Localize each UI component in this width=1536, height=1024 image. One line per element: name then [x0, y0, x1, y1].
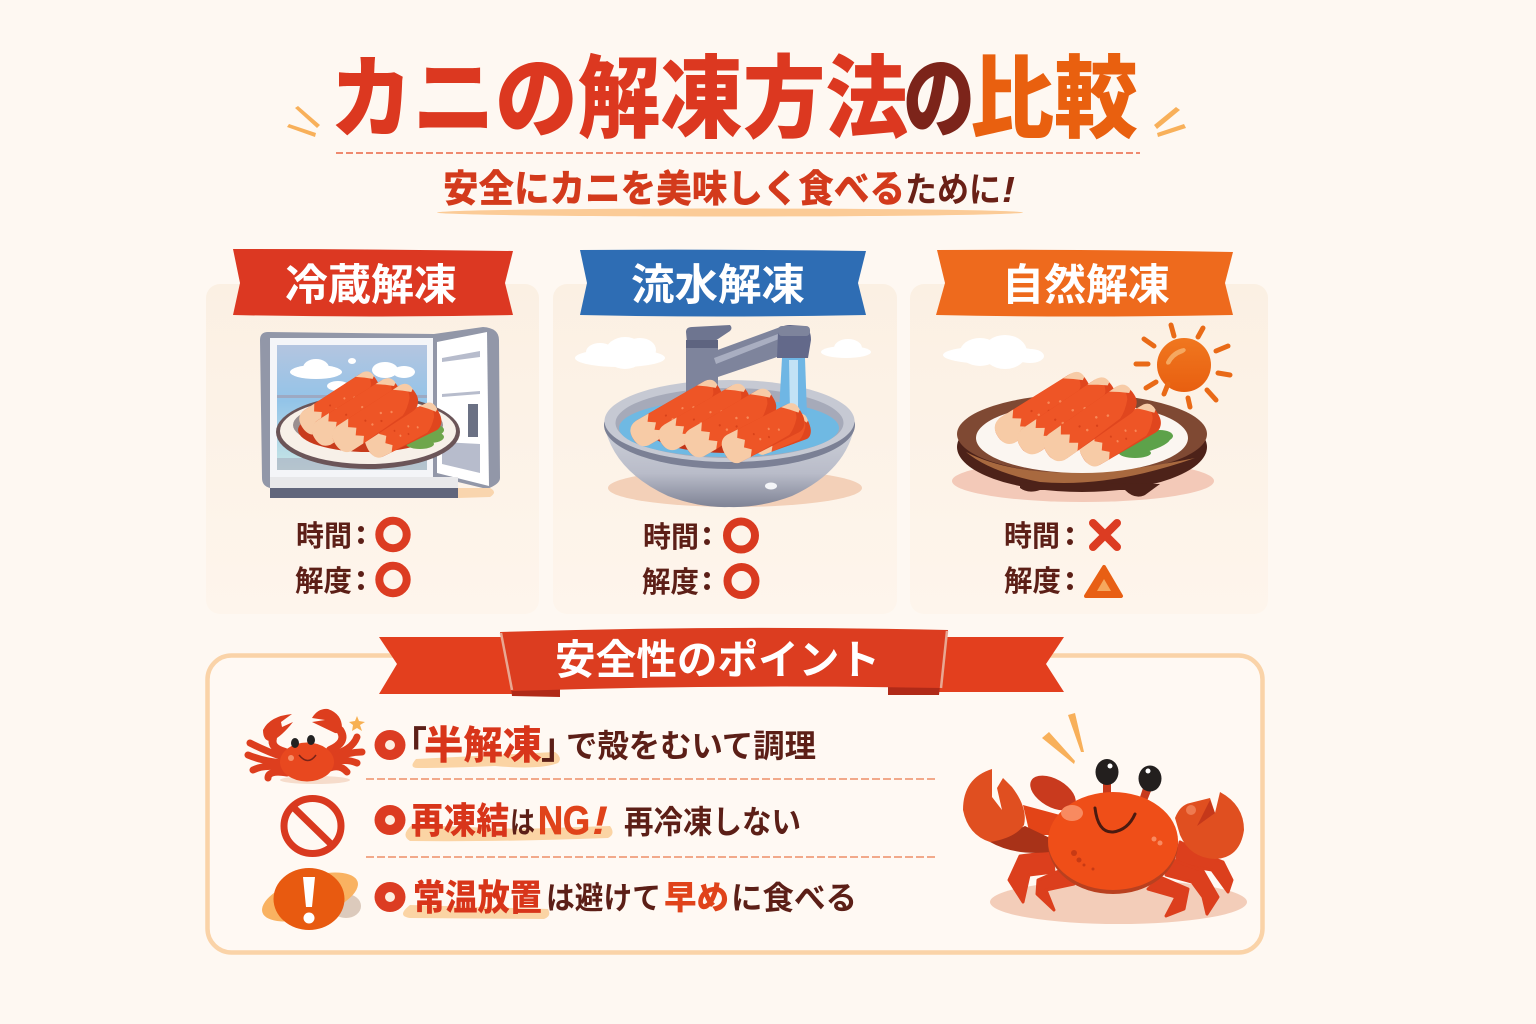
divider: [366, 778, 938, 780]
text: に食べる: [731, 880, 857, 916]
highlight: [403, 905, 549, 919]
banner: 冷蔵解凍: 冷蔵解凍: [285, 262, 457, 310]
rating: 時間: [296, 520, 407, 553]
rating: 時間: 時間: [643, 521, 699, 554]
text: [413, 877, 857, 918]
text: は: [510, 807, 535, 840]
rating: 時間: [1004, 520, 1117, 553]
banner: 自然解凍: [936, 250, 1233, 316]
text: NG: [538, 799, 590, 843]
title dashed divider: [336, 152, 1140, 154]
bullet: [374, 730, 406, 760]
divider: [366, 856, 938, 858]
subtitle: 安全にカニを美味しく食べる: [443, 169, 905, 211]
rating: 解度: [1004, 565, 1121, 598]
panel: 自然解凍: [910, 250, 1268, 614]
rating: 時間: 時間: [1004, 520, 1060, 553]
title: カニの解凍方法: [330, 50, 908, 150]
illustration: faucet: [686, 325, 811, 399]
illustration: cloud: [943, 335, 1044, 369]
text: 常温放置: [413, 877, 542, 918]
ribbon: 安全性のポイント: 安全性のポイント: [555, 637, 880, 683]
text: で殻をむいて調理: [566, 728, 816, 764]
illustration: plate with crab: [952, 368, 1214, 502]
illustration: refrigerator with crab on plate: [260, 327, 500, 498]
icon: small crab: [248, 709, 365, 784]
icon: warning: [256, 863, 364, 931]
banner: 自然解凍: 自然解凍: [1002, 262, 1170, 310]
rating: 解度: 解度: [1004, 565, 1061, 598]
rating: 時間: 時間: [296, 520, 352, 553]
text: [411, 799, 801, 843]
banner: 流水解凍: [580, 250, 866, 316]
row: 常温放置: [374, 877, 857, 919]
banner: 冷蔵解凍: [233, 249, 513, 316]
left claw: [963, 768, 1082, 853]
mascot: big crab: [963, 713, 1247, 924]
crab shadow: [990, 880, 1247, 924]
rating: 解度: [642, 566, 756, 599]
text: 」: [541, 725, 577, 766]
panel: 冷蔵解凍: [206, 249, 539, 614]
text: 「: [391, 724, 427, 765]
text: 再凍結: [411, 800, 509, 841]
rating: 解度: [295, 565, 407, 598]
rating: 時間: [643, 521, 755, 554]
panel: 安全性のポイント: [208, 628, 1262, 952]
subtitle underline: [437, 208, 1023, 216]
text: [391, 724, 816, 768]
ribbon: 安全性のポイント: [379, 628, 1064, 697]
eyes: [1096, 759, 1162, 801]
text: 早め: [664, 879, 729, 916]
text: は避けて: [546, 881, 661, 916]
text: 再冷凍しない: [624, 804, 801, 840]
text: 半解凍: [424, 725, 542, 768]
illustration: clouds: [575, 337, 871, 369]
subtitle: ために: [905, 171, 1001, 210]
row: 半解凍: [374, 724, 816, 768]
text: !: [592, 799, 608, 843]
illustration: bowl: [604, 380, 855, 507]
icon: no sign: [284, 798, 341, 854]
legs: [1009, 842, 1232, 916]
highlight: [405, 825, 613, 841]
banner: 流水解凍: 流水解凍: [631, 262, 805, 310]
title sparks left: [287, 106, 320, 137]
rating: 解度: 解度: [295, 565, 352, 598]
highlight: [412, 752, 560, 768]
title sparks right: [1154, 107, 1186, 137]
rating: 解度: 解度: [642, 566, 699, 599]
row: 再凍結: [374, 799, 801, 843]
sparks: [1042, 713, 1084, 764]
illustration: crab in bowl: [626, 376, 814, 467]
bullet: [374, 882, 406, 912]
illustration: shadow under bowl: [608, 469, 862, 507]
illustration: sun: [1136, 325, 1230, 407]
right claw: [1175, 792, 1244, 859]
title: 比較: [970, 50, 1138, 150]
subtitle: !: [1002, 169, 1015, 210]
illustration: water: [619, 358, 839, 457]
body: [1048, 792, 1178, 894]
bullet: [374, 805, 406, 835]
title: の: [903, 50, 975, 150]
panel: 流水解凍: [553, 250, 897, 614]
